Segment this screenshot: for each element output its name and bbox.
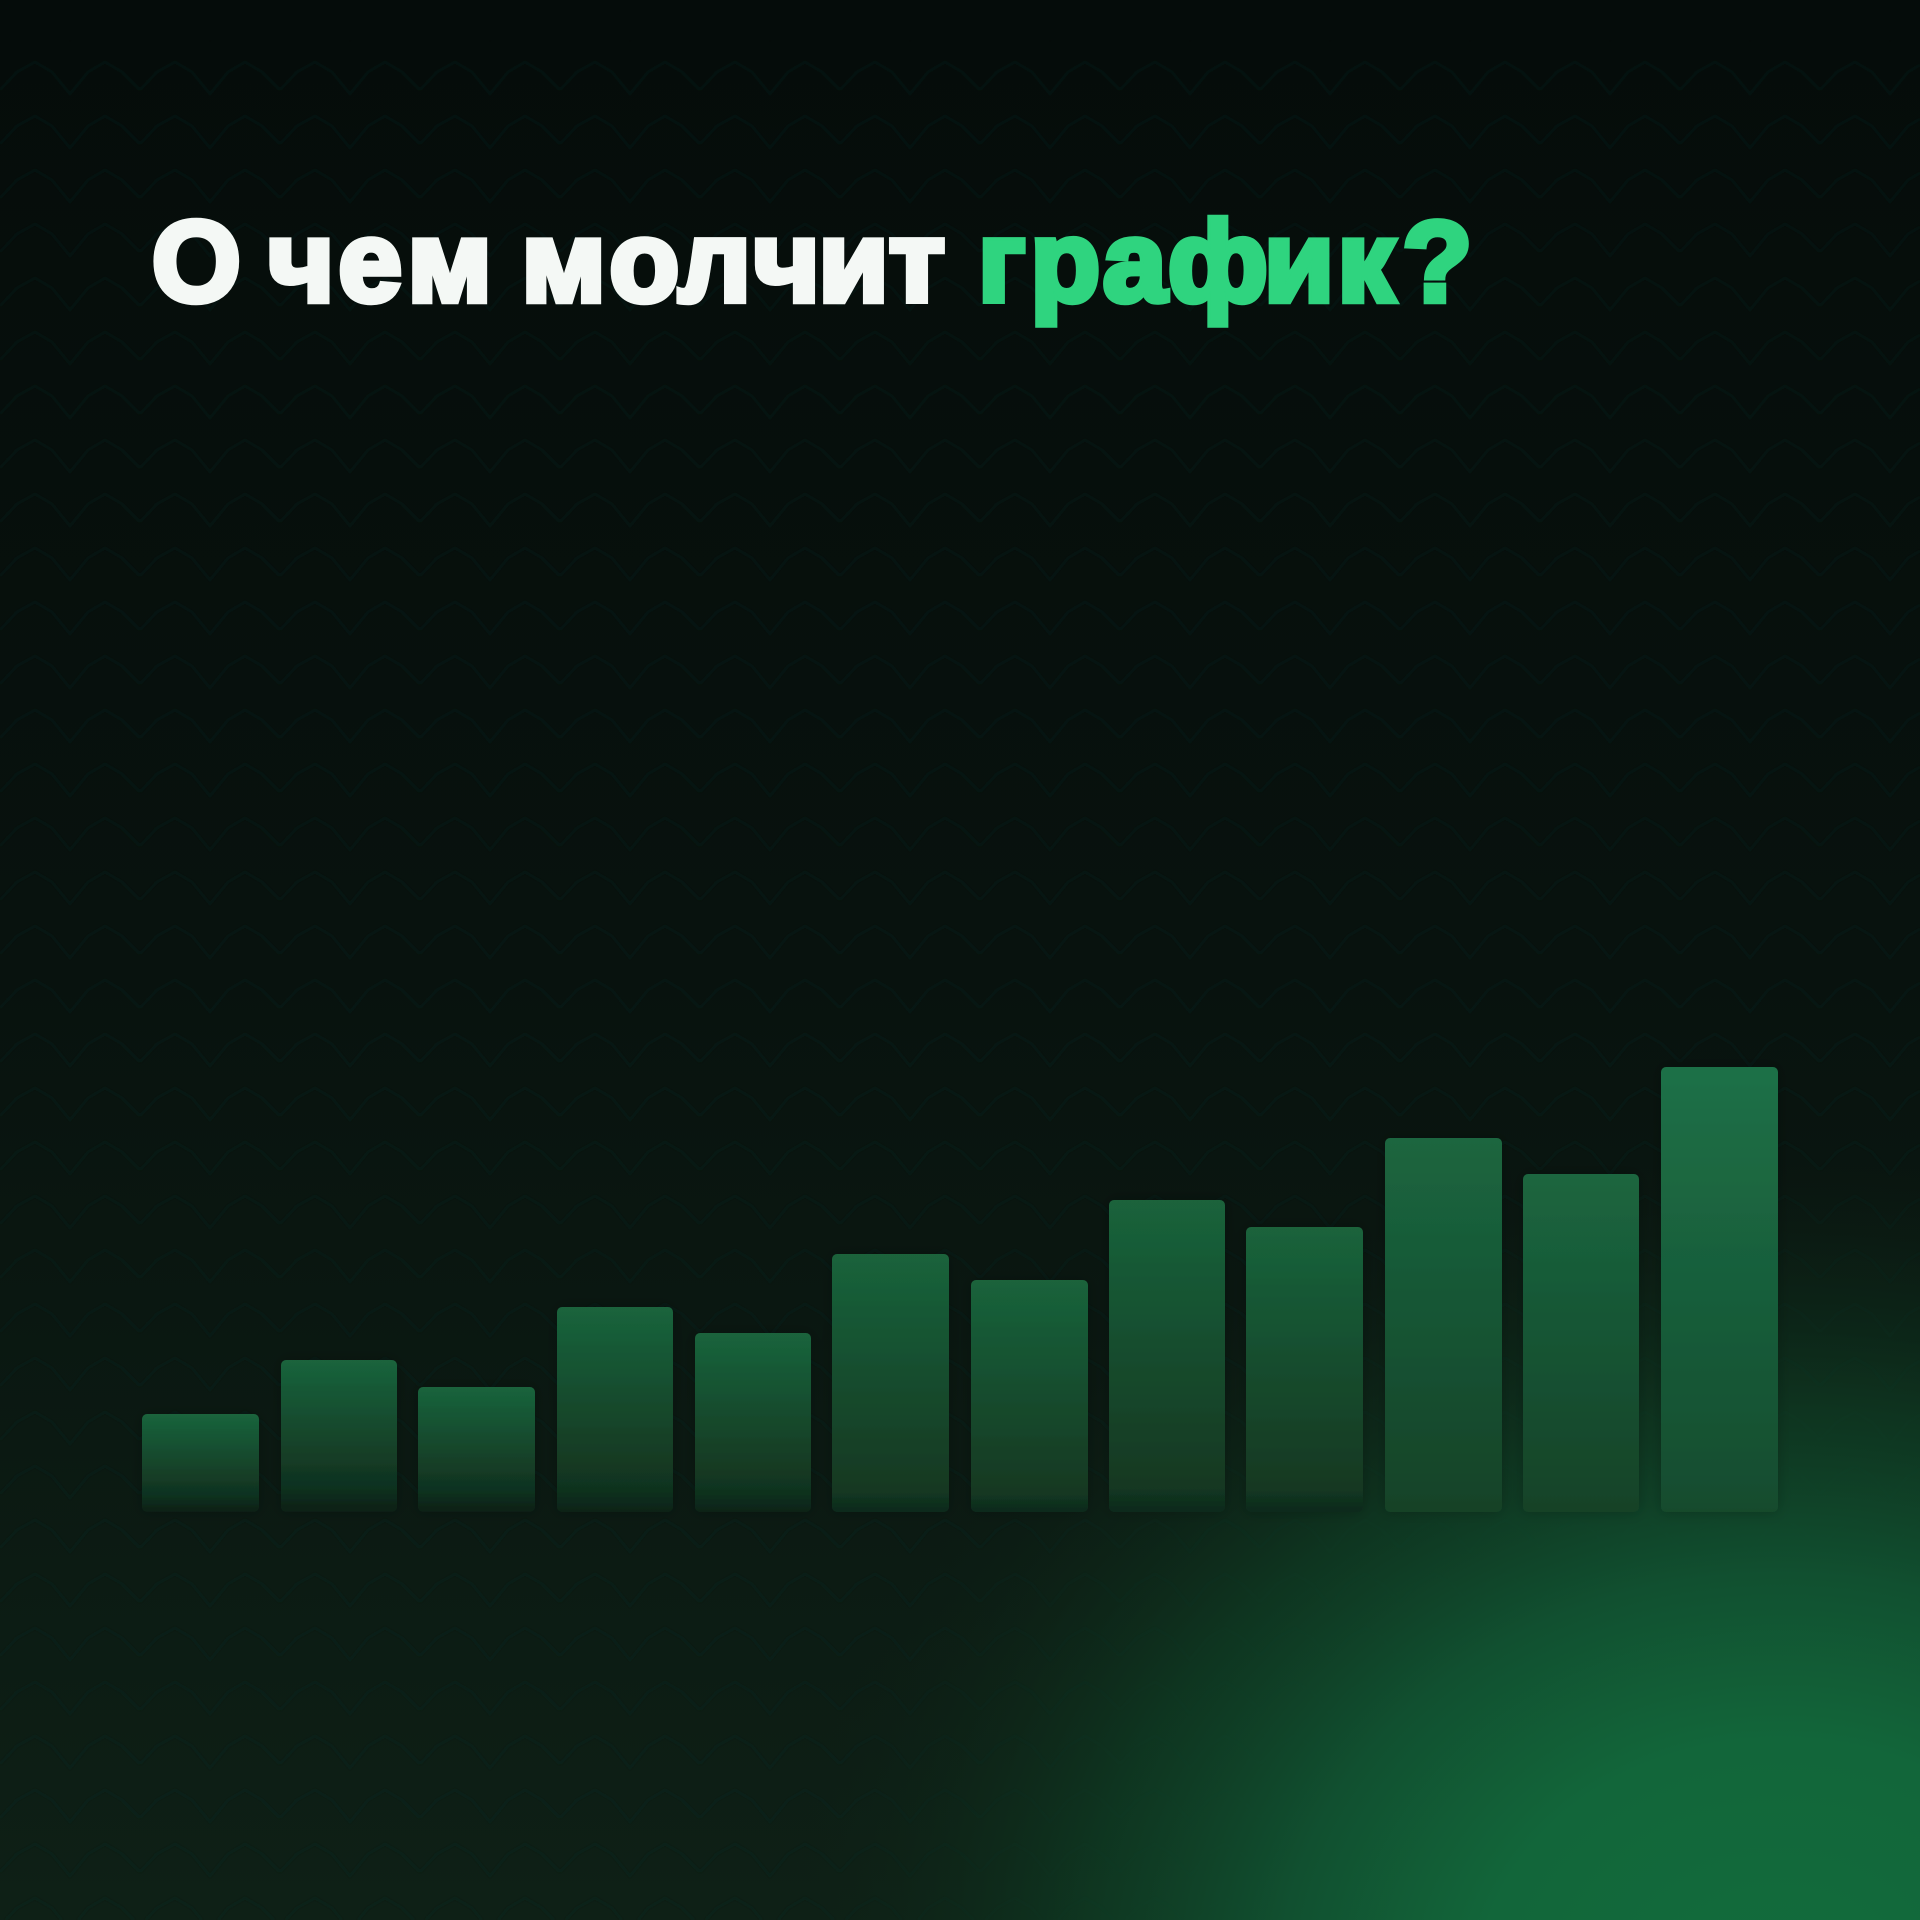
bar 11 bbox=[1523, 1174, 1639, 1512]
bar 6 bbox=[832, 1254, 949, 1512]
title: white part: О bbox=[152, 199, 241, 326]
bar 10 bbox=[1385, 1138, 1502, 1512]
bar 7 bbox=[971, 1280, 1088, 1512]
bar 12 bbox=[1661, 1067, 1778, 1512]
title: green highlighted word: график? bbox=[978, 199, 1472, 326]
title bbox=[152, 199, 1472, 326]
title: white part: чем bbox=[268, 199, 492, 326]
bar 5 bbox=[695, 1333, 811, 1512]
bar 4 bbox=[557, 1307, 673, 1512]
bar 3 bbox=[418, 1387, 535, 1512]
bar 9 bbox=[1246, 1227, 1363, 1512]
green corner glow bbox=[0, 1100, 1920, 1920]
bar 2 bbox=[281, 1360, 397, 1512]
bar chart bbox=[142, 1067, 1778, 1512]
bar 1 bbox=[142, 1414, 259, 1512]
title: white part bbox=[152, 199, 945, 326]
title: white part: молчит bbox=[522, 199, 945, 326]
bar 8 bbox=[1109, 1200, 1225, 1512]
